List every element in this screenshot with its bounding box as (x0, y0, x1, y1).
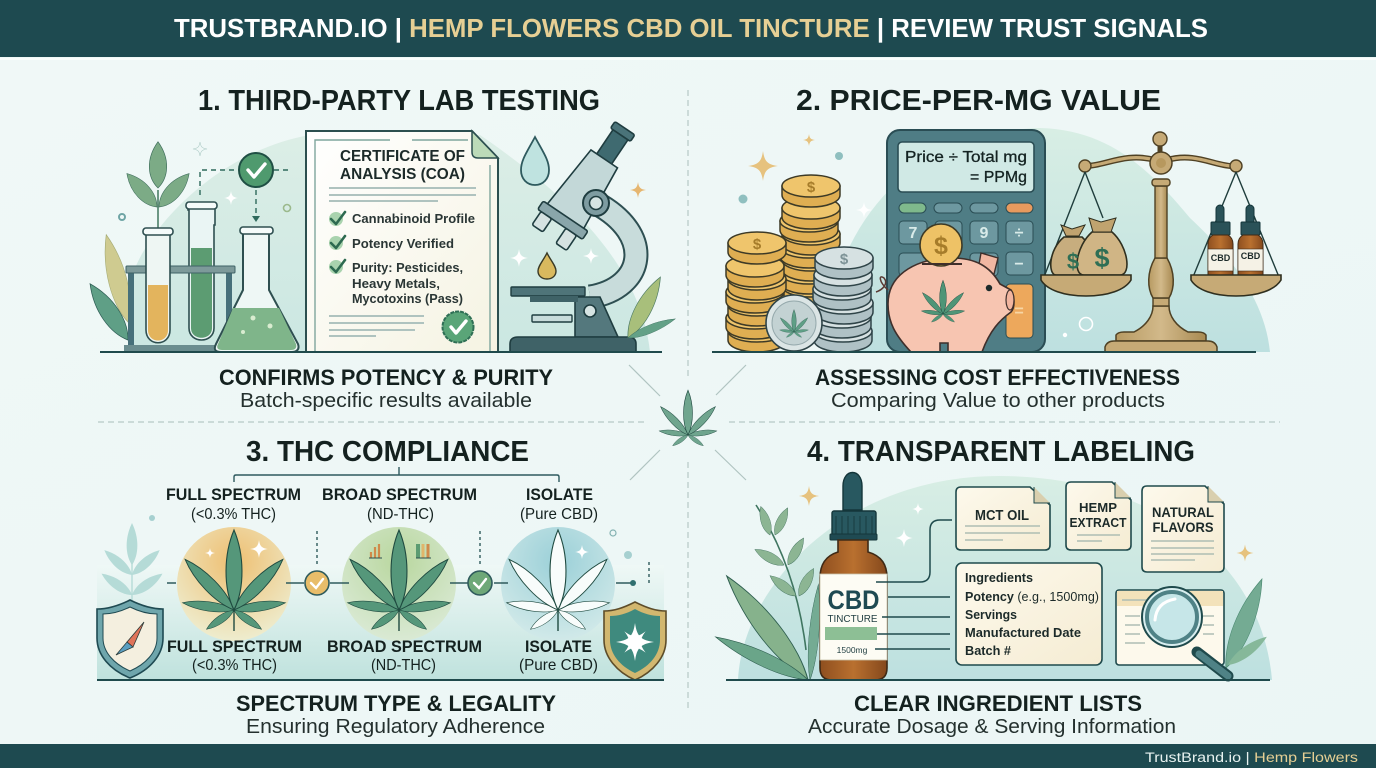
calculator: = PPMg (970, 169, 1027, 186)
left plant (713, 505, 823, 687)
piggy bank (876, 253, 1014, 352)
ground line 4 (726, 679, 1270, 681)
left scale pan with money bags: $ (1094, 243, 1110, 273)
calculator screen (898, 142, 1034, 192)
upper spectrum labels: (<0.3% THC) (191, 506, 276, 523)
label details box: Manufactured Date (965, 626, 1081, 640)
footer text: TrustBrand.io | Hemp Flowers (1145, 750, 1358, 765)
left scale pan with money bags (1041, 172, 1131, 296)
caption 1: CONFIRMS POTENCY & PURITY (219, 365, 553, 390)
lower spectrum labels: (Pure CBD) (519, 657, 598, 674)
full spectrum leaf (177, 527, 291, 641)
panel 3: THC compliance (97, 436, 666, 738)
lower spectrum labels: ISOLATE (525, 637, 592, 656)
upper spectrum labels: ISOLATE (526, 485, 593, 504)
heading 1: 1. THIRD-PARTY LAB TESTING (198, 85, 600, 117)
hemp extract card: HEMP (1079, 500, 1117, 515)
caption 2: ASSESSING COST EFFECTIVENESS (815, 365, 1180, 390)
bottle label text: CBD (828, 585, 880, 615)
caption 3: Ensuring Regulatory Adherence (246, 716, 545, 738)
document with magnifying glass (1116, 587, 1228, 676)
star shield (604, 602, 666, 680)
certificate seal (442, 312, 474, 342)
background band 3 (97, 565, 664, 680)
spectrum connectors (149, 515, 649, 586)
calculator: 9 (980, 225, 989, 242)
center hemp leaf (658, 390, 718, 448)
label details box: Batch # (965, 644, 1011, 658)
coin entering piggy bank: $ (934, 232, 948, 260)
lower spectrum labels (167, 637, 598, 674)
microscope (510, 113, 647, 352)
ground line 2 (712, 351, 1256, 353)
faded plant (99, 523, 165, 600)
certificate list: Mycotoxins (Pass) (352, 292, 463, 306)
check node green (468, 571, 492, 595)
header banner (0, 0, 1376, 60)
decorative sparkles (738, 134, 1092, 337)
upper spectrum labels: FULL SPECTRUM (166, 485, 301, 504)
gold coin stack back: $ (807, 179, 816, 196)
upper spectrum labels: (ND-THC) (367, 506, 434, 523)
silver coin stack: $ (840, 251, 849, 268)
calculator: 7 (909, 225, 918, 242)
heading 2: 2. PRICE-PER-MG VALUE (796, 85, 1161, 117)
balance scale (1041, 132, 1281, 352)
caption 2: Comparing Value to other products (831, 390, 1165, 412)
calculator: Price ÷ Total mg (905, 149, 1027, 166)
right leaves 4 (1218, 576, 1270, 671)
left scale pan with money bags: $ (1067, 249, 1079, 274)
calculator: = (1014, 303, 1024, 320)
right scale pan with CBD bottles: CBD (1241, 251, 1261, 261)
calculator: − (1014, 256, 1024, 273)
CBD tincture bottle: TINCTURE (828, 613, 878, 625)
background mound 2 (826, 128, 1270, 352)
flask (215, 227, 299, 352)
caption 3 (236, 691, 556, 738)
heading 3: 3. THC COMPLIANCE (246, 436, 529, 468)
background mound 1 (128, 135, 650, 352)
silver coin stack (813, 247, 873, 352)
check badge (239, 153, 273, 187)
certificate list: Purity: Pesticides, (352, 261, 463, 275)
certificate checks (329, 212, 345, 274)
panel 1: third-party lab testing (83, 85, 677, 412)
certificate of analysis document: ANALYSIS (COA) (340, 166, 465, 183)
lower spectrum labels: BROAD SPECTRUM (327, 637, 482, 656)
calculator (887, 130, 1045, 352)
calculator: ÷ (1015, 225, 1024, 242)
panel dividers (98, 90, 1280, 712)
caption 1 (219, 365, 553, 412)
label details box (956, 563, 1102, 665)
CBD tincture bottle: 1500mg (837, 645, 868, 655)
CBD tincture bottle (820, 472, 887, 680)
caption 4: CLEAR INGREDIENT LISTS (854, 691, 1142, 716)
certificate list (352, 212, 475, 306)
top bracket (234, 467, 559, 482)
plant and side leaves (83, 142, 292, 345)
panel 4: transparent labeling (713, 436, 1272, 738)
upper spectrum labels: (Pure CBD) (520, 506, 598, 523)
water drop (521, 137, 549, 185)
callout connectors (875, 520, 952, 649)
upper spectrum labels (166, 485, 598, 523)
certificate list: Heavy Metals, (352, 277, 440, 291)
MCT oil card (956, 487, 1050, 550)
lower spectrum labels: (<0.3% THC) (192, 657, 277, 674)
silver hemp coin (766, 295, 822, 351)
hemp extract card (1066, 482, 1131, 550)
sparkles 4 (799, 486, 1254, 562)
background mound 4 (738, 476, 1272, 680)
caption 3: SPECTRUM TYPE & LEGALITY (236, 691, 556, 716)
certificate title: CERTIFICATE OF (340, 148, 465, 165)
caption 4 (808, 691, 1176, 738)
gold coin stack front: $ (753, 236, 762, 253)
hemp extract card: EXTRACT (1070, 515, 1127, 530)
right scale pan with CBD bottles (1191, 172, 1281, 296)
ground line 1 (100, 351, 662, 353)
footer bar (0, 744, 1376, 768)
label details box: Ingredients (965, 571, 1033, 585)
gold coin stack back (780, 175, 840, 333)
certificate list: Potency Verified (352, 237, 454, 251)
panel 2: price-per-mg value (712, 85, 1281, 412)
label details box: Servings (965, 608, 1017, 622)
certificate list: Cannabinoid Profile (352, 212, 475, 226)
lower spectrum labels: FULL SPECTRUM (167, 637, 302, 656)
natural flavors card: FLAVORS (1152, 519, 1214, 535)
coin entering piggy bank (920, 224, 962, 266)
header title: TRUSTBRAND.IO | HEMP FLOWERS CBD OIL TINCTURE | REVIEW TRUST SIGNALS (174, 13, 1208, 43)
upper spectrum labels: BROAD SPECTRUM (322, 485, 477, 504)
lower spectrum labels: (ND-THC) (371, 657, 436, 674)
ground line 3 (97, 679, 664, 681)
caption 1: Batch-specific results available (240, 390, 532, 412)
right scale pan with CBD bottles: CBD (1211, 253, 1231, 263)
caption 2 (815, 365, 1180, 412)
label details box: Potency (e.g., 1500mg) (965, 590, 1099, 604)
natural flavors card (1142, 486, 1224, 572)
isolate leaf (501, 527, 615, 641)
caption 4: Accurate Dosage & Serving Information (808, 716, 1176, 738)
certificate of analysis document (306, 131, 498, 352)
broad spectrum leaf (342, 527, 456, 641)
compass shield (97, 600, 163, 678)
heading 4: 4. TRANSPARENT LABELING (807, 436, 1195, 468)
right leaves (621, 273, 677, 342)
MCT oil card: MCT OIL (975, 508, 1029, 524)
test tube rack and tubes (124, 202, 235, 352)
natural flavors card: NATURAL (1152, 504, 1214, 520)
check node amber (305, 571, 329, 595)
calculator keys (899, 203, 1033, 338)
gold coin stack front (726, 232, 786, 352)
